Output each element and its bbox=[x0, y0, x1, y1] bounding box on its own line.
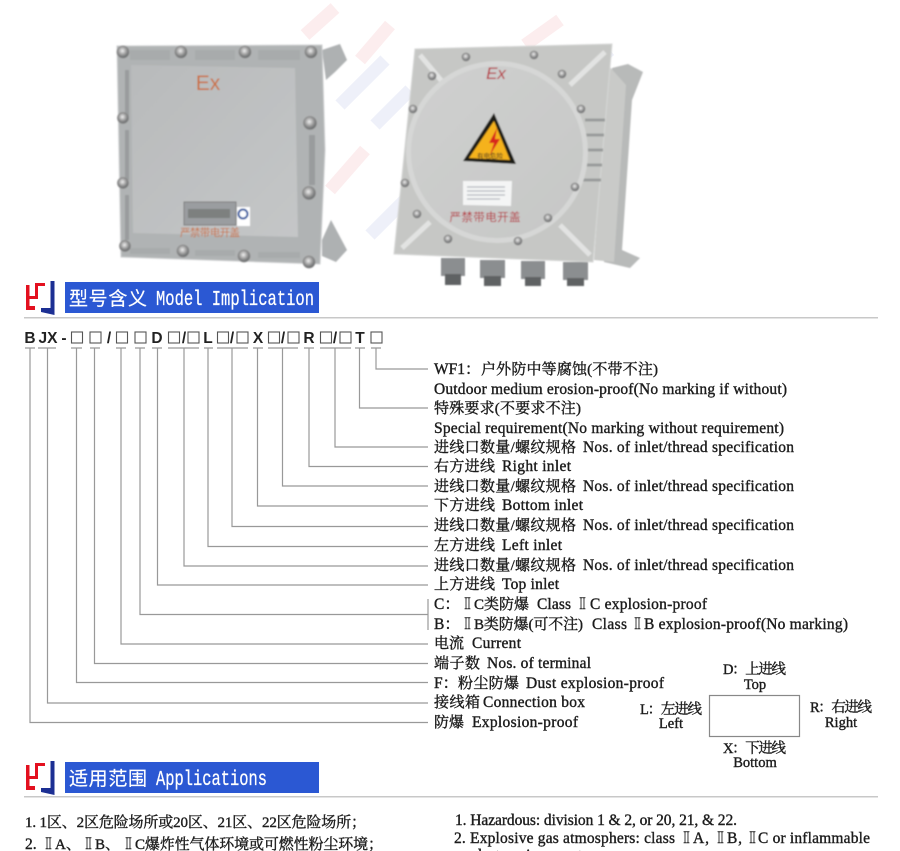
model explanation list: 特殊要求(不要求不注) bbox=[434, 400, 581, 417]
warning triangle bbox=[463, 113, 516, 164]
model explanation list: 粉尘防爆 bbox=[458, 675, 519, 692]
leader lines bbox=[25, 348, 428, 722]
model explanation list: Nos. of inlet/thread specification bbox=[583, 478, 794, 495]
model code string: / bbox=[230, 330, 235, 347]
model code string: / bbox=[333, 330, 338, 347]
warning text: 严禁带电开盖 bbox=[180, 225, 240, 240]
heading text: 适用范围 bbox=[69, 764, 147, 791]
model explanation list: 下方进线 bbox=[434, 497, 495, 514]
inlet direction diagram: Bottom bbox=[733, 755, 777, 771]
enclosure body bbox=[117, 45, 325, 264]
bolts bbox=[401, 51, 585, 245]
model explanation list: 接线箱 bbox=[434, 694, 480, 711]
model explanation list: 进线口数量/螺纹规格 bbox=[434, 438, 576, 456]
model code string: X bbox=[253, 330, 264, 347]
cable glands bbox=[441, 258, 588, 286]
model explanation list: Top inlet bbox=[502, 576, 560, 593]
model explanation list: Special requirement(No marking without requirement) bbox=[434, 420, 784, 437]
enclosure body bbox=[394, 44, 612, 262]
model explanation list: Outdoor medium erosion-proof(No marking if without) bbox=[434, 381, 787, 398]
model explanation list: 左方进线 bbox=[434, 537, 495, 554]
applications list: English: Ⅱ bbox=[748, 831, 757, 847]
model explanation list: Ⅱ bbox=[578, 597, 587, 613]
Ex mark: Ex bbox=[486, 64, 506, 83]
model explanation list: Explosion-proof bbox=[472, 714, 579, 731]
corner ribs bbox=[402, 52, 605, 255]
model explanation list bbox=[434, 360, 848, 731]
model explanation list: 端子数 bbox=[434, 655, 480, 672]
model explanation list: C： bbox=[434, 596, 460, 613]
circular cover bbox=[406, 61, 588, 243]
model explanation list: Class bbox=[592, 616, 627, 633]
model explanation list: Nos. of terminal bbox=[487, 655, 591, 672]
model explanation list: Nos. of inlet/thread specification bbox=[583, 439, 794, 456]
inlet direction diagram bbox=[640, 661, 872, 771]
mounting brackets bbox=[322, 44, 347, 262]
applications list: English: Ⅱ bbox=[716, 831, 725, 847]
applications list: Chinese: 1. 1区、2区危险场所或20区、21区、22区危险场所； bbox=[25, 814, 366, 831]
nameplate bbox=[463, 181, 512, 206]
model explanation list: Left inlet bbox=[502, 537, 563, 554]
applications list: English: 1. Hazardous: division 1 & 2, or 20, 21, & 22. bbox=[455, 812, 737, 829]
logo icon bbox=[26, 281, 54, 315]
heading banner bbox=[65, 762, 319, 793]
model explanation list: Nos. of inlet/thread specification bbox=[583, 517, 794, 534]
heading banner bbox=[65, 282, 319, 313]
bolts bbox=[117, 46, 317, 268]
applications list: English: B, bbox=[727, 830, 742, 847]
model code string: R bbox=[303, 330, 315, 347]
model explanation list: Current bbox=[472, 635, 522, 652]
cover plate bbox=[131, 65, 298, 237]
model code string: T bbox=[355, 330, 365, 347]
heading text: Model Implication bbox=[156, 289, 314, 312]
model code string: B bbox=[24, 330, 36, 347]
inlet direction diagram: X：下进线 bbox=[723, 740, 786, 757]
model code string: JX bbox=[38, 330, 58, 347]
model code string: L bbox=[203, 330, 213, 347]
inlet direction diagram: D：上进线 bbox=[723, 661, 786, 678]
model code string bbox=[24, 330, 382, 347]
logo icon bbox=[26, 761, 54, 795]
inlet direction diagram: Top bbox=[744, 677, 766, 693]
applications list: English: 2. Explosive gas atmosphers: class bbox=[454, 830, 675, 847]
model explanation list: 上方进线 bbox=[434, 576, 495, 593]
inlet direction diagram: Left bbox=[659, 716, 683, 732]
model explanation list: Nos. of inlet/thread specification bbox=[583, 557, 794, 574]
inspection window bbox=[184, 202, 250, 226]
model explanation list: 进线口数量/螺纹规格 bbox=[434, 556, 576, 574]
model explanation list: 进线口数量/螺纹规格 bbox=[434, 477, 576, 495]
heading text: 型号含义 bbox=[69, 284, 147, 311]
section heading: Applications bbox=[26, 761, 319, 795]
model explanation list: Dust explosion-proof bbox=[526, 675, 665, 692]
model explanation list: 进线口数量/螺纹规格 bbox=[434, 516, 576, 534]
model explanation list: Ⅱ bbox=[463, 597, 472, 613]
warning triangle: 有电危险 bbox=[477, 150, 504, 160]
model explanation list: B explosion-proof(No marking) bbox=[644, 616, 848, 633]
product photo: rectangular cover enclosure bbox=[117, 44, 347, 268]
model code string: D bbox=[151, 330, 163, 347]
model explanation list: 右方进线 bbox=[434, 458, 495, 475]
model code string: / bbox=[107, 330, 112, 347]
model explanation list: Bottom inlet bbox=[502, 497, 584, 514]
applications list: Chinese bbox=[25, 814, 383, 851]
model explanation list: B： bbox=[434, 616, 460, 633]
applications list: English: C or inflammable bbox=[758, 830, 870, 847]
model explanation list: Connection box bbox=[483, 694, 585, 711]
applications list: English: Ⅱ bbox=[682, 831, 691, 847]
applications list: English bbox=[454, 812, 870, 851]
model explanation list: B类防爆(可不注) bbox=[474, 615, 583, 633]
model explanation list: WF1： bbox=[434, 361, 481, 378]
model explanation list: Right inlet bbox=[502, 458, 572, 475]
model explanation list: 防爆 bbox=[434, 714, 464, 731]
side mounting panel bbox=[604, 64, 643, 268]
model code string: - bbox=[61, 330, 67, 347]
section heading: Model Implication bbox=[26, 281, 319, 315]
heading text bbox=[69, 284, 314, 312]
inlet direction diagram: L：左进线 bbox=[640, 701, 702, 718]
model explanation list: Ⅱ bbox=[633, 617, 642, 633]
product photo: round cover enclosure bbox=[394, 44, 643, 286]
heading text bbox=[69, 764, 267, 792]
model explanation list: C类防爆 bbox=[474, 595, 529, 613]
model explanation list: Class bbox=[537, 596, 571, 613]
heading text: Applications bbox=[156, 769, 267, 792]
warning text: 严禁带电开盖 bbox=[450, 209, 520, 225]
model code string: / bbox=[182, 330, 187, 347]
Ex mark: Ex bbox=[196, 72, 221, 95]
model explanation list: 户外防中等腐蚀(不带不注) bbox=[481, 360, 658, 378]
model explanation list: F： bbox=[434, 675, 458, 692]
model code string: / bbox=[281, 330, 286, 347]
model explanation list: 电流 bbox=[434, 634, 464, 652]
model explanation list: C explosion-proof bbox=[590, 596, 708, 613]
applications list: English: A, bbox=[693, 830, 709, 847]
model explanation list: Ⅱ bbox=[463, 617, 472, 633]
inlet direction diagram: R：右进线 bbox=[810, 699, 872, 716]
watermark logos bbox=[305, 8, 610, 235]
inlet direction diagram: Right bbox=[825, 715, 857, 731]
